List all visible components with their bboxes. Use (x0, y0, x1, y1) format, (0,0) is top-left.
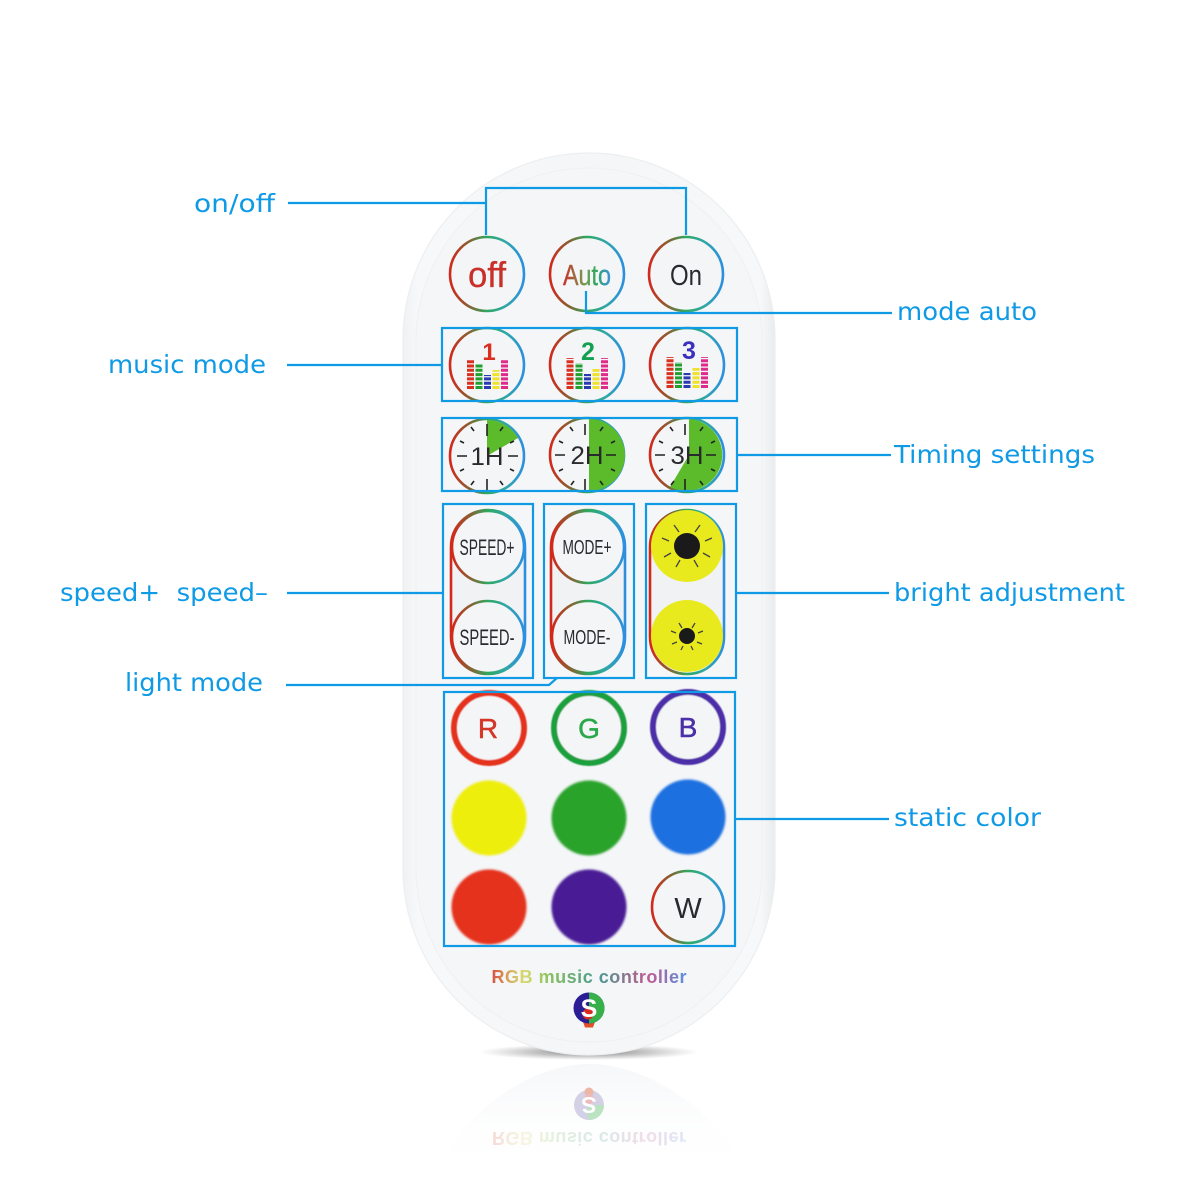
static color buttons (452, 692, 726, 944)
color swatch: yellow (452, 780, 526, 856)
connector: mode auto (586, 291, 892, 313)
button: Auto (550, 237, 624, 311)
label: mode auto: mode auto (897, 297, 1037, 326)
button: W (652, 871, 724, 943)
button: On (649, 237, 723, 311)
timer buttons (450, 418, 724, 493)
button: On: On (670, 260, 702, 292)
button: music 3 (650, 328, 724, 402)
button: G: G (578, 713, 600, 744)
button: music 2 (550, 328, 624, 402)
label: static color: static color (894, 803, 1042, 832)
button: music 1: 1 (482, 339, 496, 366)
connector: on/off (288, 188, 686, 235)
button: G (554, 693, 624, 763)
color swatch: green (552, 780, 626, 856)
logo (574, 992, 604, 1028)
speed buttons: SPEED+ (460, 535, 514, 560)
label: music mode: music mode (108, 350, 266, 379)
mode buttons: MODE+ (562, 537, 612, 559)
label: light mode: light mode (125, 668, 263, 697)
button: R (454, 693, 524, 763)
button: 2H: 2H (570, 442, 604, 470)
label: timing settings: Timing settings (893, 440, 1095, 469)
button: W: W (674, 893, 702, 925)
label: on/off: on/off (194, 189, 276, 218)
label: bright adjustment: bright adjustment (894, 578, 1125, 607)
button: 3H (650, 418, 724, 492)
button: music 1 (450, 328, 524, 402)
reflection of remote (435, 1064, 750, 1175)
color swatch: purple (552, 870, 626, 944)
button: music 2: 2 (581, 338, 595, 366)
remote control body (403, 153, 775, 1060)
connector: light mode (286, 678, 557, 685)
reflection of remote: S (581, 1092, 597, 1118)
color swatch: red (452, 870, 526, 944)
connector: bright adjustment (736, 592, 889, 594)
connector: music mode (287, 364, 442, 366)
mode buttons (551, 510, 625, 674)
speed buttons: SPEED- (460, 625, 514, 650)
icon: sun small (671, 623, 703, 650)
speed buttons (451, 510, 525, 674)
connector: static color (735, 818, 889, 820)
button: R: R (478, 713, 498, 744)
brightness buttons (650, 510, 724, 674)
label: speed: speed+ speed– (60, 578, 268, 607)
connector: speed (287, 592, 443, 594)
music mode buttons (450, 328, 724, 402)
connector: timing settings (737, 454, 891, 456)
button: B (653, 692, 723, 762)
button: B: B (679, 712, 697, 743)
button: off (450, 237, 524, 311)
button: 1H: 1H (470, 443, 504, 471)
highlight boxes (442, 328, 737, 946)
button: Auto: Auto (563, 260, 611, 292)
button: 1H (450, 419, 524, 493)
button: 2H (550, 418, 625, 492)
logo: S (581, 995, 597, 1023)
button: music 3: 3 (682, 337, 696, 365)
brand text: RGB music controller (492, 967, 686, 987)
button: off: off (468, 254, 507, 295)
icon: sun large (662, 525, 712, 567)
color swatch: blue (650, 780, 726, 854)
button: 3H: 3H (670, 442, 704, 470)
reflection of remote: RGB music controller (492, 1128, 686, 1148)
mode buttons: MODE- (564, 627, 610, 649)
